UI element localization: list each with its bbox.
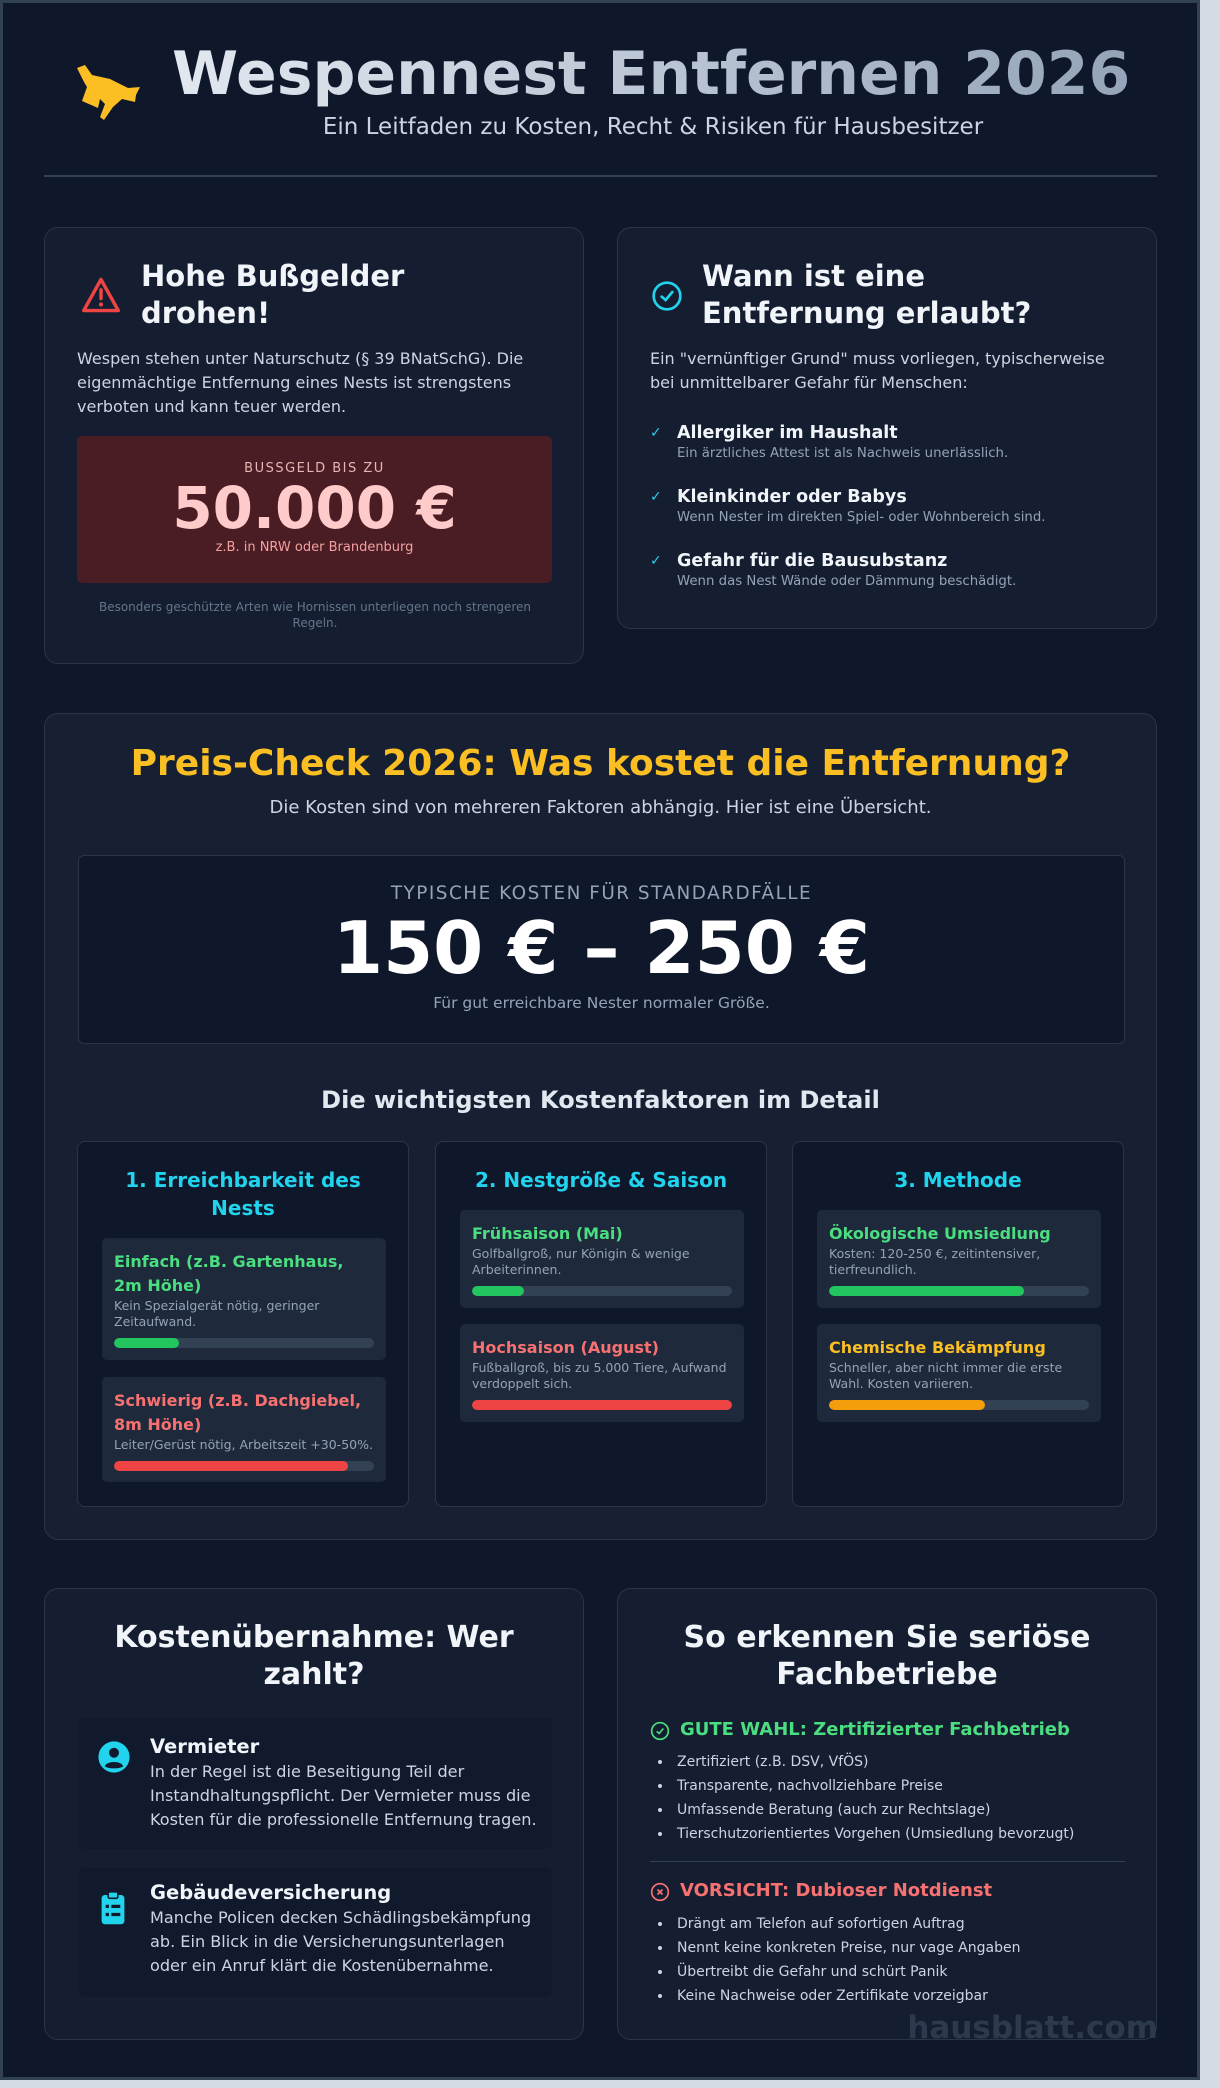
- item: peak: Hochsaison (August): [472, 1338, 659, 1357]
- fine box: 50.000 €: [172, 474, 457, 542]
- list: ✓: [650, 425, 662, 441]
- panel: price check: [44, 713, 1157, 1540]
- subtitle: Ein Leitfaden zu Kosten, Recht & Risiken für Hausbesitzer: [323, 114, 983, 140]
- factors heading: Die wichtigsten Kostenfaktoren im Detail: [321, 1086, 880, 1114]
- list: Ein ärztliches Attest ist als Nachweis unerlässlich.: [677, 446, 1008, 461]
- heading: [684, 1620, 1090, 1692]
- item: peak: Fußballgroß, bis zu 5.000 Tiere, Aufwand verdoppelt sich.: [472, 1360, 727, 1391]
- good choice: Transparente, nachvollziehbare Preise: [677, 1778, 943, 1794]
- title: Wespennest Entfernen 2026: [172, 39, 1130, 109]
- insurance box: [78, 1868, 552, 1997]
- heading: Wann ist eine: [702, 259, 925, 293]
- column: reachability: [77, 1141, 409, 1507]
- landlord box: Vermieter: [150, 1735, 259, 1758]
- icon: check circle: [652, 281, 682, 311]
- heading: Preis-Check 2026: Was kostet die Entfernung?: [131, 743, 1070, 784]
- column: reachability: 1. Erreichbarkeit des: [125, 1168, 361, 1192]
- heading: [141, 259, 404, 330]
- insurance box: Gebäudeversicherung: [150, 1881, 391, 1904]
- item: hard: [102, 1377, 386, 1482]
- fine box: z.B. in NRW oder Brandenburg: [216, 540, 413, 555]
- typical cost box: 150 € – 250 €: [333, 906, 870, 990]
- icon: clipboard: [102, 1892, 124, 1924]
- icon: wasp: [77, 65, 140, 120]
- good choice: Zertifiziert (z.B. DSV, VfÖS): [677, 1754, 868, 1770]
- typical cost box: TYPISCHE KOSTEN FÜR STANDARDFÄLLE: [391, 883, 812, 904]
- panel: when allowed: [617, 227, 1157, 629]
- heading: [702, 259, 1031, 330]
- item: relocation: Kosten: 120-250 €, zeitintensiver, tierfreundlich.: [829, 1246, 1040, 1277]
- item: chemical: Chemische Bekämpfung: [829, 1338, 1046, 1357]
- heading: [114, 1620, 514, 1692]
- good choice: Umfassende Beratung (auch zur Rechtslage): [677, 1802, 990, 1818]
- caution: VORSICHT: Dubioser Notdienst: [680, 1880, 992, 1901]
- panel: fines: [44, 227, 584, 664]
- icon: person: [98, 1741, 130, 1773]
- list: Wenn das Nest Wände oder Dämmung beschädigt.: [677, 574, 1016, 589]
- good choice: Tierschutzorientiertes Vorgehen (Umsiedlung bevorzugt): [677, 1826, 1074, 1842]
- watermark: hausblatt.com: [907, 2010, 1158, 2046]
- list: Gefahr für die Bausubstanz: [677, 551, 947, 571]
- item: early: [460, 1210, 744, 1308]
- caution: Nennt keine konkreten Preise, nur vage Angaben: [677, 1940, 1020, 1956]
- item: chemical: [817, 1324, 1101, 1422]
- item: easy: Kein Spezialgerät nötig, geringer Zeitaufwand.: [114, 1298, 319, 1329]
- item: early: Golfballgroß, nur Königin & wenige Arbeiterinnen.: [472, 1246, 690, 1277]
- insurance box: Manche Policen decken Schädlingsbekämpfung ab. Ein Blick in die Versicherungsunterlagen oder ein Anruf klärt die Kostenübernahme.: [150, 1908, 531, 1975]
- heading: drohen!: [141, 296, 270, 330]
- item: hard: Schwierig (z.B. Dachgiebel, 8m Höhe): [114, 1391, 361, 1434]
- icon: warning: [82, 278, 120, 312]
- landlord box: [78, 1718, 552, 1849]
- typical cost box: Für gut erreichbare Nester normaler Größe.: [433, 994, 770, 1012]
- heading: Entfernung erlaubt?: [702, 296, 1031, 330]
- column: reachability: Nests: [211, 1196, 275, 1220]
- good choice: [650, 1719, 1074, 1842]
- list: [650, 423, 1046, 589]
- item: early: Frühsaison (Mai): [472, 1224, 623, 1243]
- subtitle: Die Kosten sind von mehreren Faktoren abhängig. Hier ist eine Übersicht.: [270, 797, 932, 818]
- caution: Keine Nachweise oder Zertifikate vorzeigbar: [677, 1988, 988, 2004]
- heading: zahlt?: [263, 1657, 365, 1692]
- caution: [650, 1880, 1020, 2004]
- item: relocation: Ökologische Umsiedlung: [829, 1224, 1051, 1243]
- column: size & season: [435, 1141, 767, 1507]
- item: hard: Leiter/Gerüst nötig, Arbeitszeit +30-50%.: [114, 1437, 373, 1452]
- heading: So erkennen Sie seriöse: [684, 1620, 1090, 1655]
- item: relocation: [817, 1210, 1101, 1308]
- heading: Fachbetriebe: [776, 1657, 998, 1692]
- column: method: [792, 1141, 1124, 1507]
- landlord box: In der Regel ist die Beseitigung Teil der Instandhaltungspflicht. Der Vermieter muss die Kosten für die professionelle Entfernung tragen.: [150, 1762, 537, 1829]
- item: easy: [102, 1238, 386, 1360]
- column: method: 3. Methode: [894, 1168, 1022, 1192]
- list: Kleinkinder oder Babys: [677, 487, 907, 507]
- item: easy: Einfach (z.B. Gartenhaus, 2m Höhe): [114, 1252, 343, 1295]
- typical cost box: [78, 855, 1125, 1044]
- text: Ein "vernünftiger Grund" muss vorliegen, typischerweise bei unmittelbarer Gefahr für Menschen:: [650, 349, 1105, 392]
- footnote: Besonders geschützte Arten wie Hornissen unterliegen noch strengeren Regeln.: [99, 600, 531, 630]
- list: Allergiker im Haushalt: [677, 423, 898, 443]
- heading: Hohe Bußgelder: [141, 259, 404, 293]
- column: size & season: 2. Nestgröße & Saison: [475, 1168, 727, 1192]
- caution: Drängt am Telefon auf sofortigen Auftrag: [677, 1916, 965, 1932]
- caution: Übertreibt die Gefahr und schürt Panik: [677, 1964, 947, 1980]
- good choice: GUTE WAHL: Zertifizierter Fachbetrieb: [680, 1719, 1070, 1740]
- list: ✓: [650, 489, 662, 505]
- panel: who pays: [44, 1588, 584, 2040]
- item: chemical: Schneller, aber nicht immer die erste Wahl. Kosten variieren.: [829, 1360, 1062, 1391]
- text: Wespen stehen unter Naturschutz (§ 39 BNatSchG). Die eigenmächtige Entfernung eines Nests ist strengstens verboten und kann teuer werden.: [77, 349, 523, 416]
- panel: reputable companies: [617, 1588, 1157, 2040]
- fine box: [77, 436, 552, 583]
- list: Wenn Nester im direkten Spiel- oder Wohnbereich sind.: [677, 510, 1046, 525]
- list: ✓: [650, 553, 662, 569]
- item: peak: [460, 1324, 744, 1422]
- heading: Kostenübernahme: Wer: [114, 1620, 514, 1655]
- fine box: BUSSGELD BIS ZU: [244, 461, 385, 476]
